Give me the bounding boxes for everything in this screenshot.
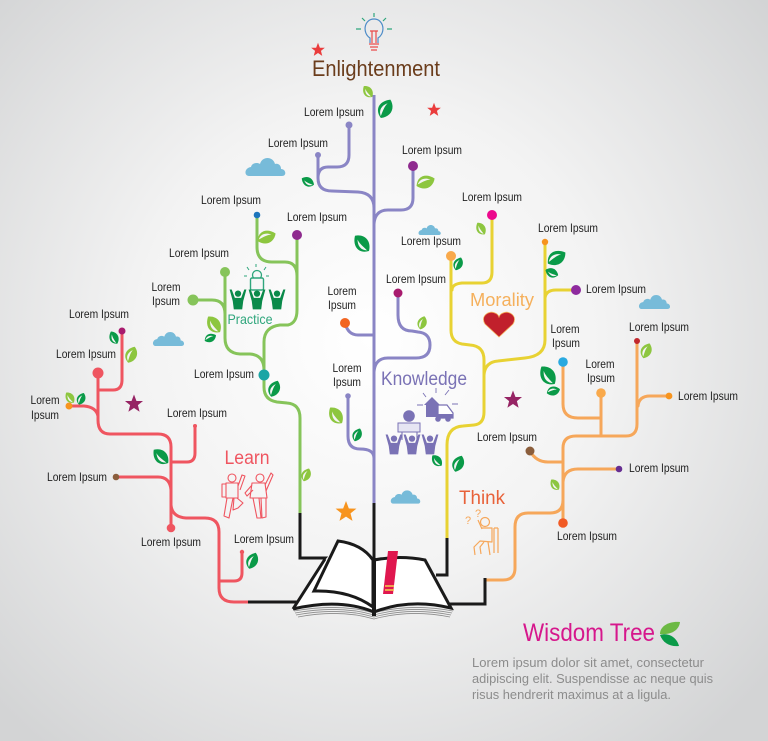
labels: Lorem Ipsum bbox=[268, 136, 328, 150]
labels: Lorem Ipsum bbox=[287, 210, 347, 224]
bookmark bbox=[383, 551, 398, 594]
heading: Practice with icon bbox=[228, 264, 285, 327]
labels: Lorem bbox=[332, 361, 362, 375]
heading: Practice with icon: Practice bbox=[228, 311, 273, 327]
labels: Lorem Ipsum bbox=[386, 272, 446, 286]
labels: Lorem bbox=[30, 393, 60, 407]
branches: practice green tree bbox=[193, 215, 300, 513]
stars bbox=[125, 43, 522, 521]
labels: Lorem Ipsum bbox=[234, 532, 294, 546]
labels: Lorem Ipsum bbox=[194, 367, 254, 381]
labels bbox=[30, 105, 738, 549]
branch end dots bbox=[66, 122, 672, 554]
branches: learn red tree bbox=[69, 331, 248, 602]
heading: Learn with icon bbox=[222, 448, 273, 518]
text block: description bbox=[472, 656, 713, 702]
labels: Lorem Ipsum bbox=[629, 461, 689, 475]
labels: Lorem Ipsum bbox=[402, 143, 462, 157]
labels: Lorem Ipsum bbox=[47, 470, 107, 484]
text block: description: adipiscing elit. Suspendisse ac neque quis bbox=[472, 672, 713, 686]
labels: Lorem Ipsum bbox=[56, 347, 116, 361]
icon: light bulb bbox=[356, 13, 392, 50]
heading: Morality with heart bbox=[470, 290, 534, 337]
labels: Ipsum bbox=[552, 336, 580, 350]
labels: Lorem Ipsum bbox=[141, 535, 201, 549]
heading: Morality with heart: Morality bbox=[470, 290, 534, 310]
branches: think orange tree bbox=[485, 342, 669, 580]
icon: wisdom tree leaves bbox=[660, 622, 680, 646]
text block: description: Lorem ipsum dolor sit amet, consectetur bbox=[472, 656, 704, 670]
clouds bbox=[153, 158, 670, 504]
title: Enlightenment: Enlightenment bbox=[312, 56, 440, 81]
branches: knowledge purple tree bbox=[318, 95, 430, 503]
labels: Lorem bbox=[328, 284, 357, 298]
labels: Lorem Ipsum bbox=[586, 282, 646, 296]
labels: Lorem Ipsum bbox=[401, 234, 461, 248]
labels: Lorem Ipsum bbox=[69, 307, 129, 321]
labels: Ipsum bbox=[587, 371, 615, 385]
labels: Ipsum bbox=[333, 375, 361, 389]
labels: Lorem Ipsum bbox=[629, 320, 689, 334]
labels: Lorem Ipsum bbox=[201, 193, 261, 207]
branches: morality yellow tree bbox=[447, 215, 575, 538]
text block: description: risus hendrerit maximus at a ligula. bbox=[472, 688, 671, 702]
labels: Lorem bbox=[550, 322, 580, 336]
heading: Think with icon: ? bbox=[465, 515, 471, 527]
labels: Lorem Ipsum bbox=[477, 430, 537, 444]
labels: Lorem Ipsum bbox=[304, 105, 364, 119]
labels: Lorem Ipsum bbox=[462, 190, 522, 204]
heading: Think with icon: ? bbox=[475, 508, 481, 520]
leaves bbox=[63, 84, 654, 571]
heading: Knowledge with icon: Knowledge bbox=[381, 369, 467, 390]
labels: Lorem bbox=[152, 280, 181, 294]
labels: Ipsum bbox=[152, 294, 180, 308]
labels: Ipsum bbox=[328, 298, 356, 312]
labels: Lorem Ipsum bbox=[169, 246, 229, 260]
labels: Lorem Ipsum bbox=[557, 529, 617, 543]
heading: Think with icon bbox=[459, 488, 505, 555]
heading: Knowledge with icon bbox=[381, 369, 467, 454]
open book bbox=[293, 541, 453, 619]
heading: Think with icon: Think bbox=[459, 488, 505, 509]
book connectors bbox=[248, 503, 485, 604]
labels: Ipsum bbox=[31, 408, 59, 422]
heading: Wisdom Tree: Wisdom Tree bbox=[523, 619, 655, 647]
labels: Lorem Ipsum bbox=[167, 406, 227, 420]
heading: Learn with icon: Learn bbox=[224, 448, 270, 469]
labels: Lorem Ipsum bbox=[678, 389, 738, 403]
labels: Lorem bbox=[586, 357, 615, 371]
labels: Lorem Ipsum bbox=[538, 221, 598, 235]
